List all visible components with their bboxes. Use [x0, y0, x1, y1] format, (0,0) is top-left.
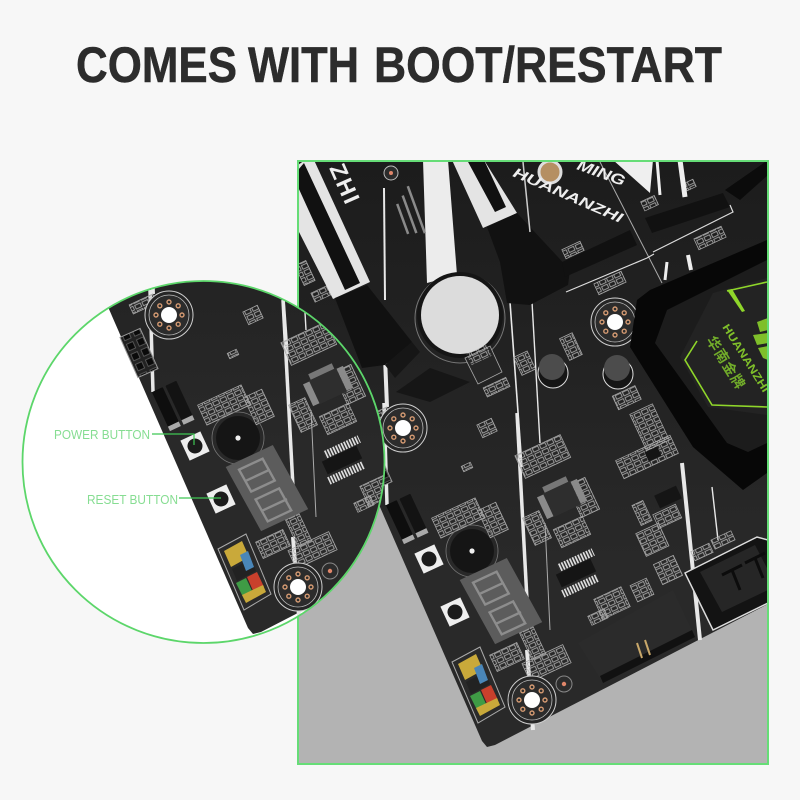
- title: WITH: [248, 37, 359, 93]
- CPU heatsink: 华南金牌: [703, 333, 749, 392]
- CMOS battery: [415, 272, 505, 384]
- panel: motherboard photo frame: [297, 160, 769, 765]
- board lettering: HUANANZHI: [511, 164, 627, 226]
- title: BOOT/RESTART: [374, 37, 722, 93]
- label: power button: POWER BUTTON: [54, 427, 150, 442]
- front panel header: [600, 630, 695, 683]
- magnified board: [108, 282, 384, 634]
- electrolytic capacitors: [538, 354, 633, 389]
- title: [76, 37, 722, 93]
- frame border: [298, 161, 768, 764]
- CPU heatsink: [630, 240, 771, 490]
- label: power button: [54, 427, 194, 445]
- top via: [384, 166, 398, 180]
- CPU heatsink: HUANANZHI: [719, 322, 771, 395]
- PCIe slot one: [298, 160, 370, 299]
- white chevron: [615, 162, 653, 193]
- board traces and components: [299, 162, 767, 747]
- callout: magnified circle: [22, 280, 386, 644]
- clip shadow: [396, 368, 470, 402]
- slot retention clips: [335, 213, 570, 378]
- SATA connector: [685, 537, 768, 630]
- title: COMES: [76, 37, 237, 93]
- top capacitor: [539, 161, 561, 183]
- white wide trace: [423, 160, 457, 283]
- screw hole near heatsink: [591, 298, 639, 346]
- panel: motherboard photo frame: ZHI: [324, 159, 366, 209]
- PCIe slot two: [452, 160, 517, 228]
- panel: motherboard photo frame: MING: [575, 157, 628, 190]
- silkscreen marks: [396, 186, 426, 234]
- label: reset button: RESET BUTTON: [87, 492, 178, 507]
- M.2 slots: [562, 160, 768, 292]
